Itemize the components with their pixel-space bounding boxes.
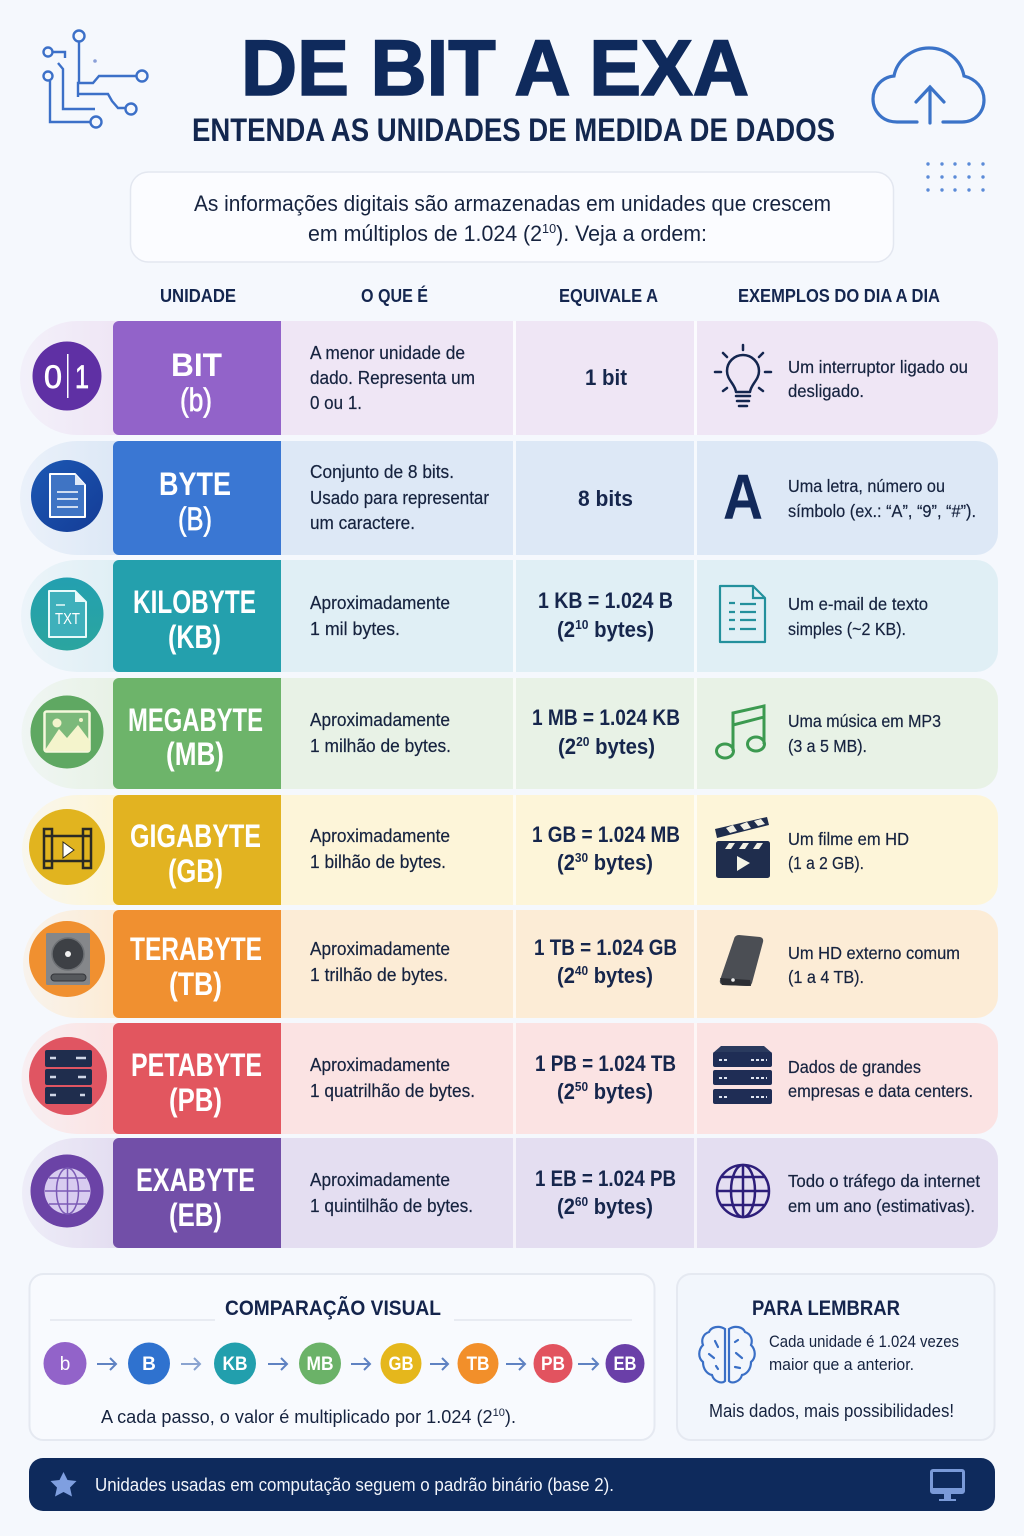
unit sequence chain: MB (306, 1354, 334, 1375)
icon: txt file (30, 578, 104, 650)
icon: data center servers (713, 1046, 772, 1104)
unit sequence chain: GB (388, 1354, 414, 1375)
exabyte description (310, 1170, 473, 1216)
kilobyte unit label (113, 560, 281, 672)
petabyte equivalent: (2 (557, 1079, 577, 1104)
terabyte unit label (113, 910, 281, 1018)
intro callout: As informações digitais são armazenadas em unidades que crescem (194, 191, 831, 216)
icon: external drive (720, 935, 763, 986)
icon: server rack (29, 1037, 107, 1115)
byte description: Conjunto de 8 bits. (310, 462, 454, 482)
kilobyte equivalent: (2 (557, 617, 577, 642)
megabyte unit label: (MB) (166, 736, 224, 772)
petabyte description: 1 quatrilhão de bytes. (310, 1081, 475, 1101)
kilobyte example (788, 594, 928, 639)
megabyte example: Uma música em MP3 (788, 711, 941, 731)
petabyte example (788, 1057, 973, 1101)
table column headers: EQUIVALE A (559, 286, 658, 306)
table column headers: O QUE É (361, 285, 428, 306)
terabyte unit label: (TB) (169, 966, 222, 1002)
byte example (788, 476, 976, 521)
row: byte (18, 440, 998, 556)
megabyte equivalent: (2 (558, 734, 578, 759)
unit sequence chain: KB (222, 1354, 248, 1375)
remember tagline: Mais dados, mais possibilidades! (709, 1401, 954, 1421)
icon: txt file: TXT (55, 611, 80, 628)
petabyte description (310, 1055, 475, 1101)
terabyte example: Um HD externo comum (788, 943, 960, 963)
exabyte description: 1 quintilhão de bytes. (310, 1196, 473, 1216)
petabyte example: empresas e data centers. (788, 1081, 973, 1101)
terabyte equivalent: 1 TB = 1.024 GB (534, 935, 677, 960)
bit example (788, 357, 968, 401)
comparison caption: 10 (493, 1407, 505, 1419)
terabyte unit label: TERABYTE (130, 931, 262, 967)
megabyte unit label: MEGABYTE (128, 702, 263, 738)
intro callout (130, 172, 894, 262)
row: megabyte (18, 677, 998, 790)
icon: circuit (44, 30, 148, 128)
row: kilobyte (18, 559, 998, 673)
kilobyte description: 1 mil bytes. (310, 619, 400, 639)
unit sequence chain (44, 1342, 644, 1385)
gigabyte unit label: (GB) (168, 853, 223, 889)
byte unit label (113, 441, 281, 555)
exabyte equivalent: bytes) (588, 1194, 653, 1219)
icon: brain (699, 1327, 755, 1382)
byte unit label: (B) (178, 501, 212, 537)
megabyte equivalent: bytes) (589, 734, 655, 759)
footer bar (29, 1458, 995, 1511)
bit description: 0 ou 1. (310, 393, 362, 413)
row: terabyte (18, 909, 998, 1019)
unit sequence chain: b (60, 1354, 70, 1375)
kilobyte equivalent: bytes) (588, 617, 654, 642)
exabyte equivalent: 1 EB = 1.024 PB (535, 1166, 676, 1191)
terabyte description: 1 trilhão de bytes. (310, 965, 448, 985)
petabyte equivalent: 50 (575, 1079, 588, 1094)
comparison heading: COMPARAÇÃO VISUAL (225, 1297, 441, 1320)
petabyte unit label (113, 1023, 281, 1134)
terabyte equivalent: (2 (557, 963, 577, 988)
icon: globe (717, 1165, 769, 1217)
gigabyte example: Um filme em HD (788, 829, 909, 849)
comparison caption: A cada passo, o valor é multiplicado por 1.024 (2 (101, 1407, 490, 1427)
row: petabyte (18, 1022, 998, 1135)
petabyte unit label: (PB) (169, 1082, 222, 1118)
intro callout: ). Veja a ordem: (556, 221, 707, 246)
row: gigabyte (18, 794, 998, 906)
intro callout: 10 (542, 221, 556, 236)
exabyte description: Aproximadamente (310, 1170, 450, 1190)
megabyte description: 1 milhão de bytes. (310, 736, 451, 756)
byte unit label: BYTE (159, 466, 231, 502)
petabyte equivalent (535, 1051, 676, 1104)
remember heading: PARA LEMBRAR (752, 1297, 900, 1320)
exabyte equivalent: (2 (557, 1194, 577, 1219)
icon: light bulb (715, 345, 771, 406)
icon: globe badge (30, 1154, 104, 1228)
megabyte description: Aproximadamente (310, 710, 450, 730)
gigabyte equivalent: 30 (575, 850, 588, 865)
remember text: maior que a anterior. (769, 1356, 914, 1374)
unit sequence chain: B (142, 1354, 156, 1375)
table column headers (160, 285, 940, 306)
icon: cloud upload (873, 48, 984, 123)
title: DE BIT A EXA (241, 23, 749, 112)
terabyte equivalent (534, 935, 677, 988)
icon: document (31, 460, 103, 532)
icon: zero one (32, 342, 102, 410)
kilobyte equivalent (538, 588, 673, 642)
kilobyte example: Um e-mail de texto (788, 594, 928, 614)
exabyte equivalent: 60 (575, 1194, 588, 1209)
petabyte unit label: PETABYTE (131, 1047, 262, 1083)
exabyte unit label: (EB) (169, 1197, 222, 1233)
decorative dots (926, 162, 985, 192)
bit description: dado. Representa um (310, 368, 475, 388)
terabyte equivalent: 40 (575, 963, 588, 978)
row: exabyte (18, 1137, 998, 1249)
panel: remember (677, 1274, 994, 1440)
exabyte example: Todo o tráfego da internet (788, 1171, 980, 1191)
gigabyte description (310, 826, 450, 872)
unit sequence chain: PB (541, 1354, 565, 1375)
footer note: Unidades usadas em computação seguem o padrão binário (base 2). (95, 1475, 614, 1495)
exabyte example (788, 1171, 980, 1216)
gigabyte equivalent: bytes) (588, 850, 653, 875)
kilobyte unit label: KILOBYTE (133, 584, 256, 620)
exabyte example: em um ano (estimativas). (788, 1196, 975, 1216)
byte description: Usado para representar (310, 488, 489, 508)
bit example: Um interruptor ligado ou (788, 357, 968, 377)
kilobyte example: simples (~2 KB). (788, 619, 906, 639)
terabyte description: Aproximadamente (310, 939, 450, 959)
bit equivalent: 1 bit (585, 365, 628, 390)
megabyte example: (3 a 5 MB). (788, 736, 867, 756)
gigabyte equivalent: (2 (557, 850, 577, 875)
megabyte example (788, 711, 941, 756)
petabyte description: Aproximadamente (310, 1055, 450, 1075)
icon: star (50, 1472, 76, 1496)
byte example: Uma letra, número ou (788, 476, 945, 496)
icon: zero one: 1 (75, 359, 89, 395)
megabyte description (310, 710, 451, 756)
petabyte equivalent: 1 PB = 1.024 TB (535, 1051, 676, 1076)
icon: picture (30, 696, 104, 768)
terabyte example: (1 a 4 TB). (788, 967, 864, 987)
terabyte equivalent: bytes) (588, 963, 653, 988)
kilobyte description (310, 593, 450, 639)
gigabyte equivalent: 1 GB = 1.024 MB (532, 822, 680, 847)
comparison caption: ). (505, 1407, 516, 1427)
kilobyte description: Aproximadamente (310, 593, 450, 613)
byte description: um caractere. (310, 513, 415, 533)
byte description (310, 462, 489, 533)
bit unit label: (b) (180, 382, 212, 418)
byte example: símbolo (ex.: “A”, “9”, “#”). (788, 501, 976, 521)
kilobyte unit label: (KB) (168, 619, 221, 655)
gigabyte description: 1 bilhão de bytes. (310, 852, 446, 872)
table column headers: EXEMPLOS DO DIA A DIA (738, 286, 940, 306)
panel: visual comparison (30, 1274, 654, 1440)
byte equivalent: 8 bits (578, 486, 633, 511)
megabyte equivalent: 1 MB = 1.024 KB (532, 705, 680, 730)
icon: zero one: 0 (44, 359, 62, 395)
terabyte description (310, 939, 450, 985)
icon: monitor (930, 1469, 965, 1501)
kilobyte equivalent: 1 KB = 1.024 B (538, 588, 673, 613)
gigabyte unit label (113, 795, 281, 905)
bit example: desligado. (788, 381, 864, 401)
terabyte example (788, 943, 960, 987)
megabyte equivalent (532, 705, 680, 759)
exabyte unit label: EXABYTE (136, 1162, 255, 1198)
megabyte equivalent: 20 (576, 734, 589, 749)
kilobyte equivalent: 10 (575, 617, 588, 632)
gigabyte description: Aproximadamente (310, 826, 450, 846)
bit description: A menor unidade de (310, 343, 465, 363)
icon: letter A: A (723, 461, 763, 533)
subtitle: ENTENDA AS UNIDADES DE MEDIDA DE DADOS (192, 112, 835, 148)
gigabyte example: (1 a 2 GB). (788, 853, 864, 873)
icon: music note (716, 706, 764, 758)
unit sequence chain: EB (614, 1354, 636, 1375)
unit sequence chain: TB (466, 1354, 490, 1375)
petabyte equivalent: bytes) (588, 1079, 653, 1104)
icon: text document (720, 586, 765, 642)
gigabyte example (788, 829, 909, 873)
remember text: Cada unidade é 1.024 vezes (769, 1333, 959, 1351)
gigabyte unit label: GIGABYTE (130, 818, 261, 854)
bit description (310, 343, 475, 413)
gigabyte equivalent (532, 822, 680, 875)
row: bit (18, 320, 998, 436)
petabyte example: Dados de grandes (788, 1057, 921, 1077)
icon: hard disk (29, 921, 105, 997)
bit unit label (113, 321, 281, 435)
table column headers: UNIDADE (160, 286, 236, 306)
exabyte equivalent (535, 1166, 676, 1219)
icon: clapperboard (715, 817, 770, 878)
bit unit label: BIT (171, 347, 222, 383)
megabyte unit label (113, 678, 281, 789)
icon: film strip (29, 809, 105, 885)
intro callout: em múltiplos de 1.024 (2 (308, 221, 549, 246)
exabyte unit label (113, 1138, 281, 1248)
remember text (769, 1333, 959, 1374)
